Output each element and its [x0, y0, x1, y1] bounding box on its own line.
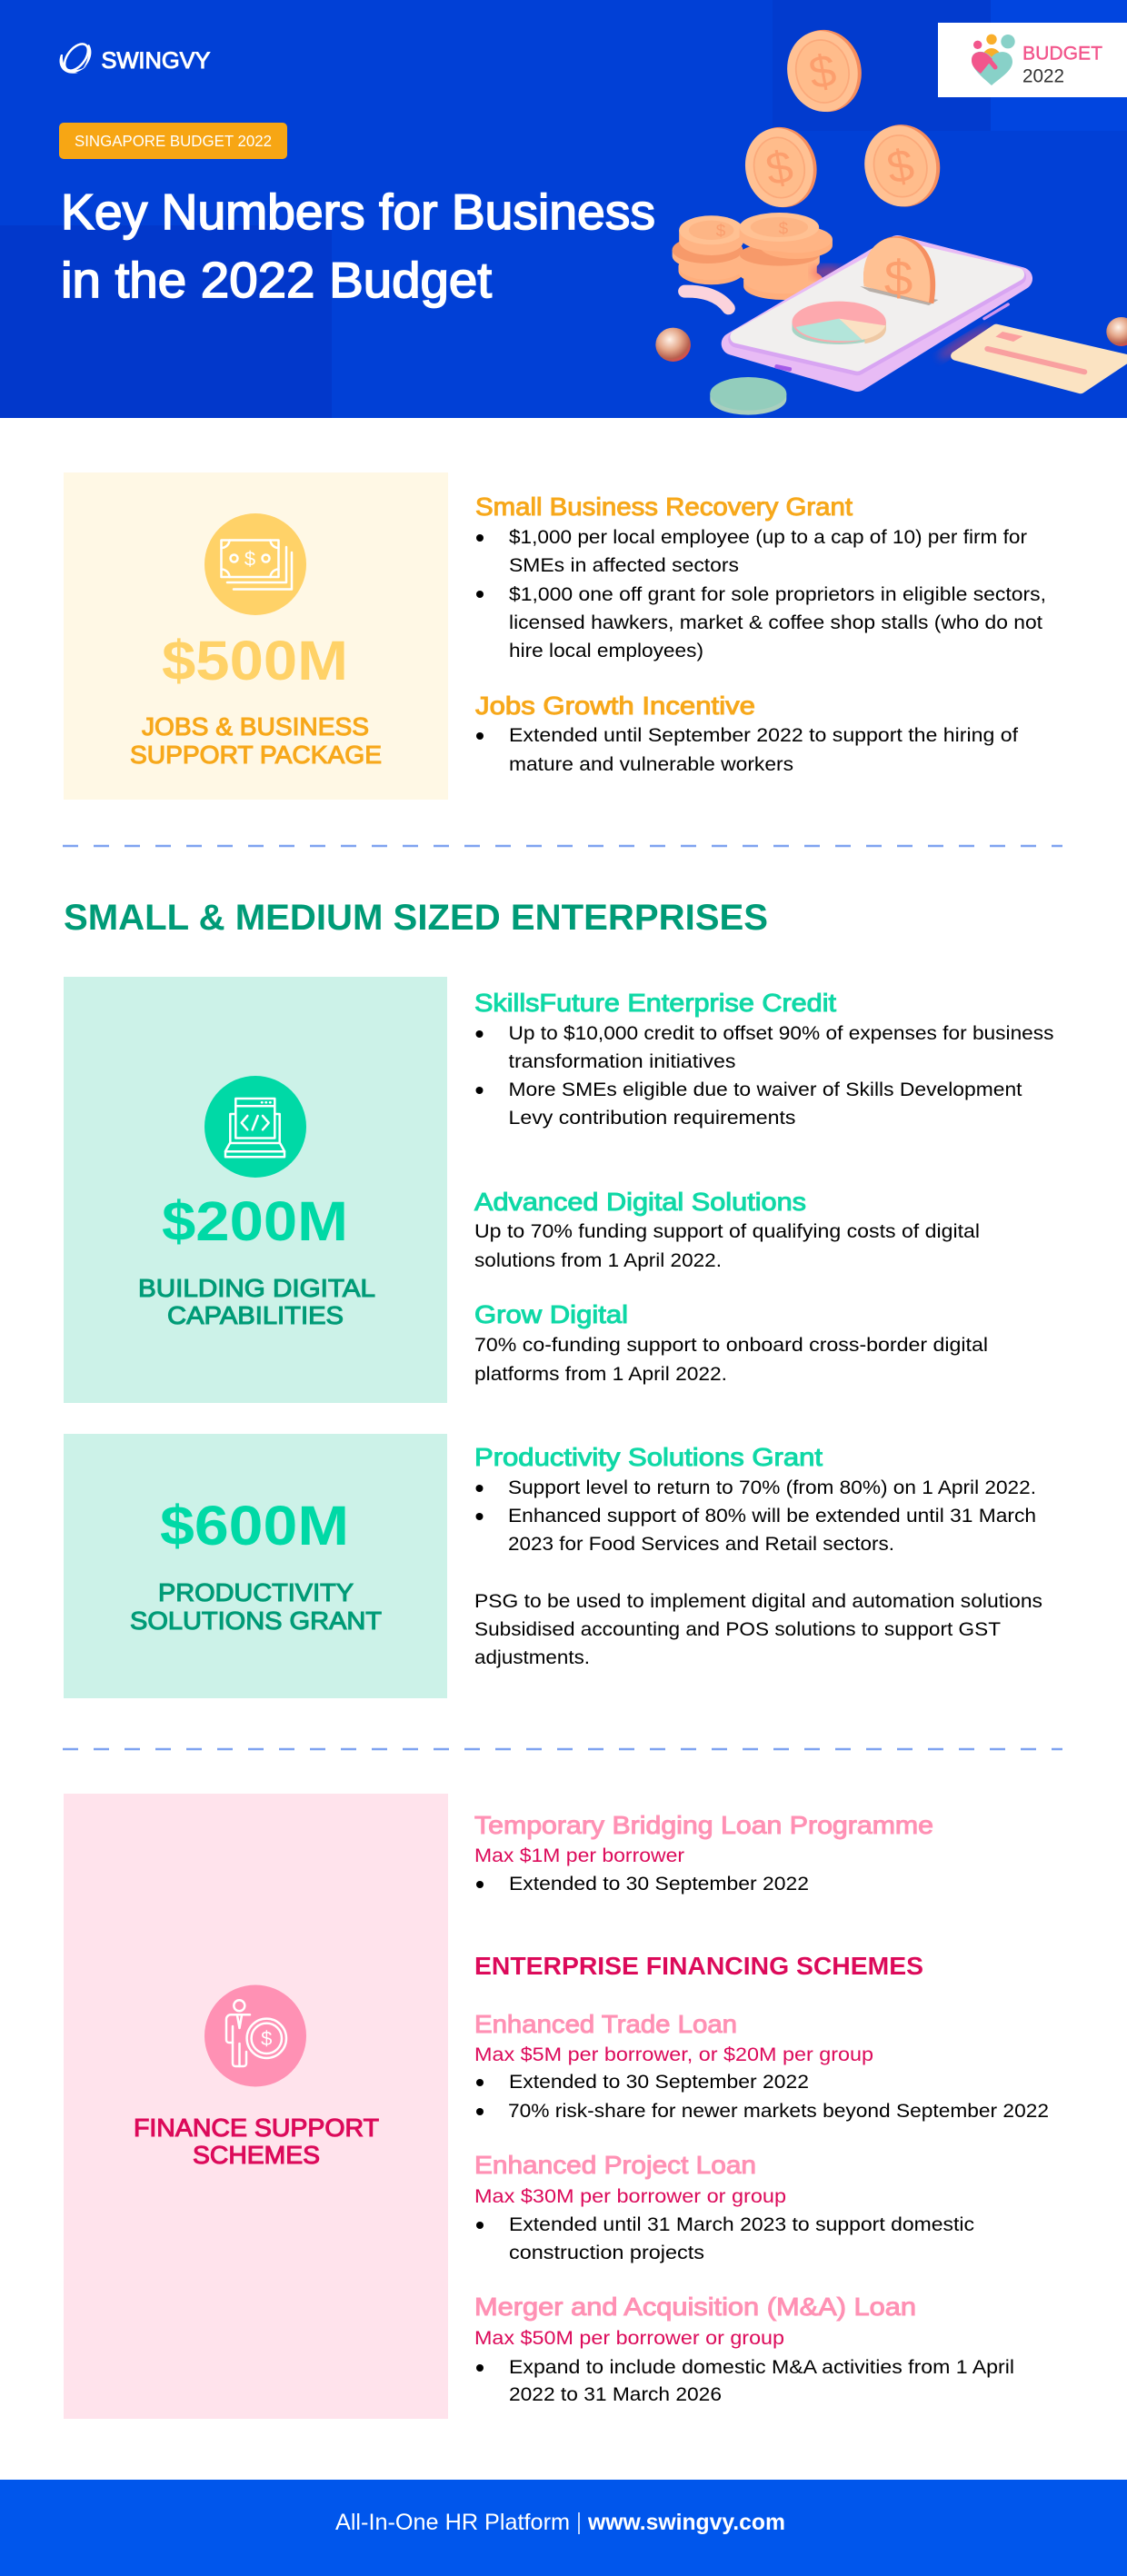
text block: Grow Digital — [474, 1300, 988, 1385]
text block: Merger and Acquisition Loan: Merger and Acquisition (M&A) Loan — [474, 2293, 916, 2321]
text block: Enhanced Trade Loan: Extended to 30 September 2022 — [509, 2071, 809, 2093]
label: finance support schemes: SCHEMES — [193, 2141, 320, 2169]
text block: PSG usage — [474, 1590, 1042, 1668]
panel: jobs and business support — [64, 472, 448, 800]
text block: Jobs Growth Incentive: Jobs Growth Incentive — [475, 691, 755, 720]
text block: SkillsFuture Enterprise Credit: transformation initiatives — [509, 1050, 736, 1072]
text block: Enhanced Project Loan: Enhanced Project Loan — [474, 2151, 756, 2179]
text block: Enhanced Trade Loan: Enhanced Trade Loan — [474, 2010, 737, 2038]
footer: www.swingvy.com — [587, 2510, 785, 2535]
label: productivity solutions grant: SOLUTIONS GRANT — [130, 1606, 382, 1635]
text block: PSG usage: Subsidised accounting and POS solutions to support GST — [474, 1618, 1001, 1640]
label: jobs and business — [130, 712, 382, 769]
text block: Merger and Acquisition Loan: Expand to include domestic M&A activities from 1 April — [509, 2356, 1014, 2378]
label: finance support schemes — [134, 2114, 379, 2169]
falling coin 3 — [858, 119, 947, 213]
text block: Grow Digital: Grow Digital — [474, 1300, 628, 1328]
text block: Enhanced Project Loan: construction projects — [509, 2242, 704, 2263]
text block: Small Business Recovery Grant: $1,000 per local employee (up to a cap of 10) per firm for — [509, 526, 1027, 548]
text block: SkillsFuture Enterprise Credit: SkillsFuture Enterprise Credit — [474, 989, 836, 1017]
title: Key Numbers for Business — [61, 184, 655, 240]
illustration: coins and phone — [655, 25, 1127, 415]
icon: person with coin — [204, 1984, 306, 2086]
phone screen — [737, 247, 1017, 364]
icon: laptop code — [204, 1076, 306, 1178]
payment card — [955, 329, 1126, 389]
label: productivity solutions grant — [130, 1578, 382, 1635]
coin stack right: $ — [779, 219, 789, 237]
label: finance support schemes: FINANCE SUPPORT — [134, 2114, 379, 2142]
text block: Temporary Bridging Loan Programme: Extended to 30 September 2022 — [509, 1873, 809, 1895]
coin slot — [860, 286, 938, 305]
logo: Budget 2022 — [938, 23, 1127, 97]
text block: Enhanced Trade Loan: Max $5M per borrower, or $20M per group — [474, 2044, 873, 2065]
footer: All-In-One HR Platform — [335, 2510, 570, 2535]
logo: Swingvy — [60, 40, 211, 75]
text block: Small Business Recovery Grant: hire local employees) — [509, 640, 703, 661]
falling coin 2 — [739, 122, 823, 213]
text block: SkillsFuture Enterprise Credit: Up to $10,000 credit to offset 90% of expenses for business — [509, 1022, 1054, 1044]
mint disc — [710, 377, 786, 415]
label: productivity solutions grant: PRODUCTIVITY — [158, 1578, 354, 1606]
sphere right — [1106, 317, 1127, 346]
badge: Singapore Budget 2022: SINGAPORE BUDGET 2022 — [75, 132, 272, 150]
section heading: small and medium sized enterprises: SMALL & MEDIUM SIZED ENTERPRISES — [64, 898, 768, 938]
icon: banknotes — [204, 513, 306, 615]
amount: $500M: $500M — [162, 630, 348, 691]
text block: Productivity Solutions Grant: 2023 for Food Services and Retail sectors. — [508, 1533, 894, 1555]
text block: Grow Digital: platforms from 1 April 2022. — [474, 1363, 727, 1385]
coin in phone — [863, 236, 935, 306]
label: jobs and business: JOBS & BUSINESS — [142, 712, 369, 741]
falling coin 3: $ — [883, 139, 918, 194]
title — [61, 184, 655, 308]
panel: building digital capabilities — [64, 977, 447, 1403]
text block: Enhanced Project Loan: Max $30M per borrower or group — [474, 2185, 786, 2207]
coin stack left — [673, 215, 744, 284]
logo: Budget 2022: BUDGET — [1022, 43, 1102, 65]
footer — [0, 2480, 1127, 2576]
text block: Advanced Digital Solutions — [474, 1188, 980, 1271]
falling coin 2: $ — [762, 141, 797, 195]
pink tube — [684, 292, 729, 308]
text block: Productivity Solutions Grant: Support level to return to 70% (from 80%) on 1 April 2022. — [508, 1477, 1036, 1498]
text block: Enhanced Project Loan — [474, 2151, 974, 2263]
text block: SkillsFuture Enterprise Credit — [474, 989, 1054, 1129]
text block: Advanced Digital Solutions: Up to 70% funding support of qualifying costs of digital — [474, 1220, 980, 1242]
text block: Small Business Recovery Grant: licensed hawkers, market & coffee shop stalls (who do not — [509, 612, 1042, 633]
text block: Enhanced Trade Loan: 70% risk-share for newer markets beyond September 2022 — [508, 2100, 1049, 2122]
text block: Jobs Growth Incentive — [475, 691, 1018, 775]
badge: Singapore Budget 2022 — [59, 123, 287, 159]
text block: Small Business Recovery Grant: Small Business Recovery Grant — [475, 492, 853, 521]
coin stack right — [739, 213, 833, 300]
falling coin 1 — [781, 25, 868, 118]
heading: enterprise financing schemes: ENTERPRISE FINANCING SCHEMES — [474, 1952, 923, 1980]
label: building digital capabilities: BUILDING DIGITAL — [138, 1274, 375, 1302]
icon: person with coin: $ — [261, 2027, 272, 2050]
text block: Advanced Digital Solutions: solutions from 1 April 2022. — [474, 1249, 722, 1271]
text block: Productivity Solutions Grant — [474, 1443, 1036, 1555]
text block: Jobs Growth Incentive: Extended until September 2022 to support the hiring of — [509, 724, 1018, 746]
text block: PSG usage: PSG to be used to implement digital and automation solutions — [474, 1590, 1042, 1612]
text block: Advanced Digital Solutions: Advanced Digital Solutions — [474, 1188, 806, 1216]
text block: Merger and Acquisition Loan: 2022 to 31 March 2026 — [509, 2383, 722, 2405]
text block: Enhanced Trade Loan — [474, 2010, 1049, 2122]
logo: Swingvy: SWINGVY — [102, 48, 211, 74]
label: jobs and business: SUPPORT PACKAGE — [130, 741, 382, 769]
panel: finance support schemes — [64, 1794, 448, 2419]
text block: Small Business Recovery Grant: SMEs in affected sectors — [509, 554, 739, 576]
text block: Temporary Bridging Loan Programme — [474, 1811, 933, 1895]
text block: Enhanced Project Loan: Extended until 31 March 2023 to support domestic — [509, 2213, 974, 2235]
header banner — [0, 0, 1127, 418]
sphere left — [655, 328, 691, 362]
text block: Small Business Recovery Grant: $1,000 one off grant for sole proprietors in eligible sectors, — [509, 583, 1046, 605]
text block: Small Business Recovery Grant — [475, 492, 1046, 661]
amount: $200M: $200M — [162, 1190, 348, 1252]
panel: productivity solutions grant — [64, 1434, 447, 1698]
falling coin 1: $ — [805, 45, 840, 99]
text block: SkillsFuture Enterprise Credit: Levy contribution requirements — [509, 1107, 796, 1129]
icon: banknotes: $ — [244, 547, 255, 571]
text block: Merger and Acquisition Loan — [474, 2293, 1014, 2405]
text block: SkillsFuture Enterprise Credit: More SMEs eligible due to waiver of Skills Development — [509, 1079, 1022, 1100]
text block: PSG usage: adjustments. — [474, 1646, 590, 1668]
coin stack left: $ — [716, 221, 726, 240]
coin in phone: $ — [884, 250, 913, 306]
label: building digital capabilities — [138, 1274, 375, 1329]
text block: Temporary Bridging Loan Programme: Max $1M per borrower — [474, 1845, 684, 1866]
text block: Merger and Acquisition Loan: Max $50M per borrower or group — [474, 2327, 784, 2349]
pie chart — [793, 302, 886, 344]
phone body — [733, 247, 1021, 380]
title: in the 2022 Budget — [61, 252, 492, 308]
text block: Jobs Growth Incentive: mature and vulnerable workers — [509, 753, 793, 775]
amount: $600M: $600M — [160, 1495, 349, 1557]
text block: Productivity Solutions Grant: Enhanced support of 80% will be extended until 31 March — [508, 1505, 1036, 1527]
logo: Budget 2022: 2022 — [1022, 65, 1064, 87]
text block: Productivity Solutions Grant: Productivity Solutions Grant — [474, 1443, 823, 1471]
label: building digital capabilities: CAPABILITIES — [167, 1301, 344, 1329]
text block: Temporary Bridging Loan Programme: Temporary Bridging Loan Programme — [474, 1811, 933, 1839]
text block: Grow Digital: 70% co-funding support to onboard cross-border digital — [474, 1334, 988, 1356]
